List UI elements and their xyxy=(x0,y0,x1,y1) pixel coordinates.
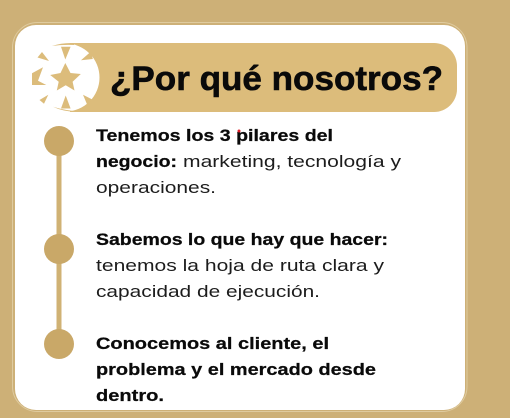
text block: pillars: Tenemos los 3 pilares del xyxy=(96,126,333,145)
heading banner xyxy=(70,43,457,112)
text block: pillars xyxy=(96,126,402,197)
text block: customer xyxy=(96,334,376,405)
text block: roadmap: tenemos la hoja de ruta clara y xyxy=(96,256,385,275)
text block: pillars: operaciones. xyxy=(96,178,216,197)
text block: customer: Conocemos al cliente, el xyxy=(96,334,329,353)
icon: star badge xyxy=(32,43,100,112)
timeline xyxy=(44,126,74,359)
timeline dot 3 xyxy=(44,329,74,359)
title: ¿Por qué nosotros? xyxy=(110,60,443,98)
text block: roadmap xyxy=(96,230,388,301)
timeline dot 2 xyxy=(44,234,74,264)
text block: roadmap: capacidad de ejecución. xyxy=(96,282,320,301)
text block: customer: problema y el mercado desde xyxy=(96,360,376,379)
text block: pillars: marketing, tecnología y xyxy=(183,152,402,171)
text block: customer: dentro. xyxy=(96,386,164,405)
timeline dot 1 xyxy=(44,126,74,156)
text block: pillars: negocio: xyxy=(96,152,177,171)
text block: roadmap: Sabemos lo que hay que hacer: xyxy=(96,230,388,249)
